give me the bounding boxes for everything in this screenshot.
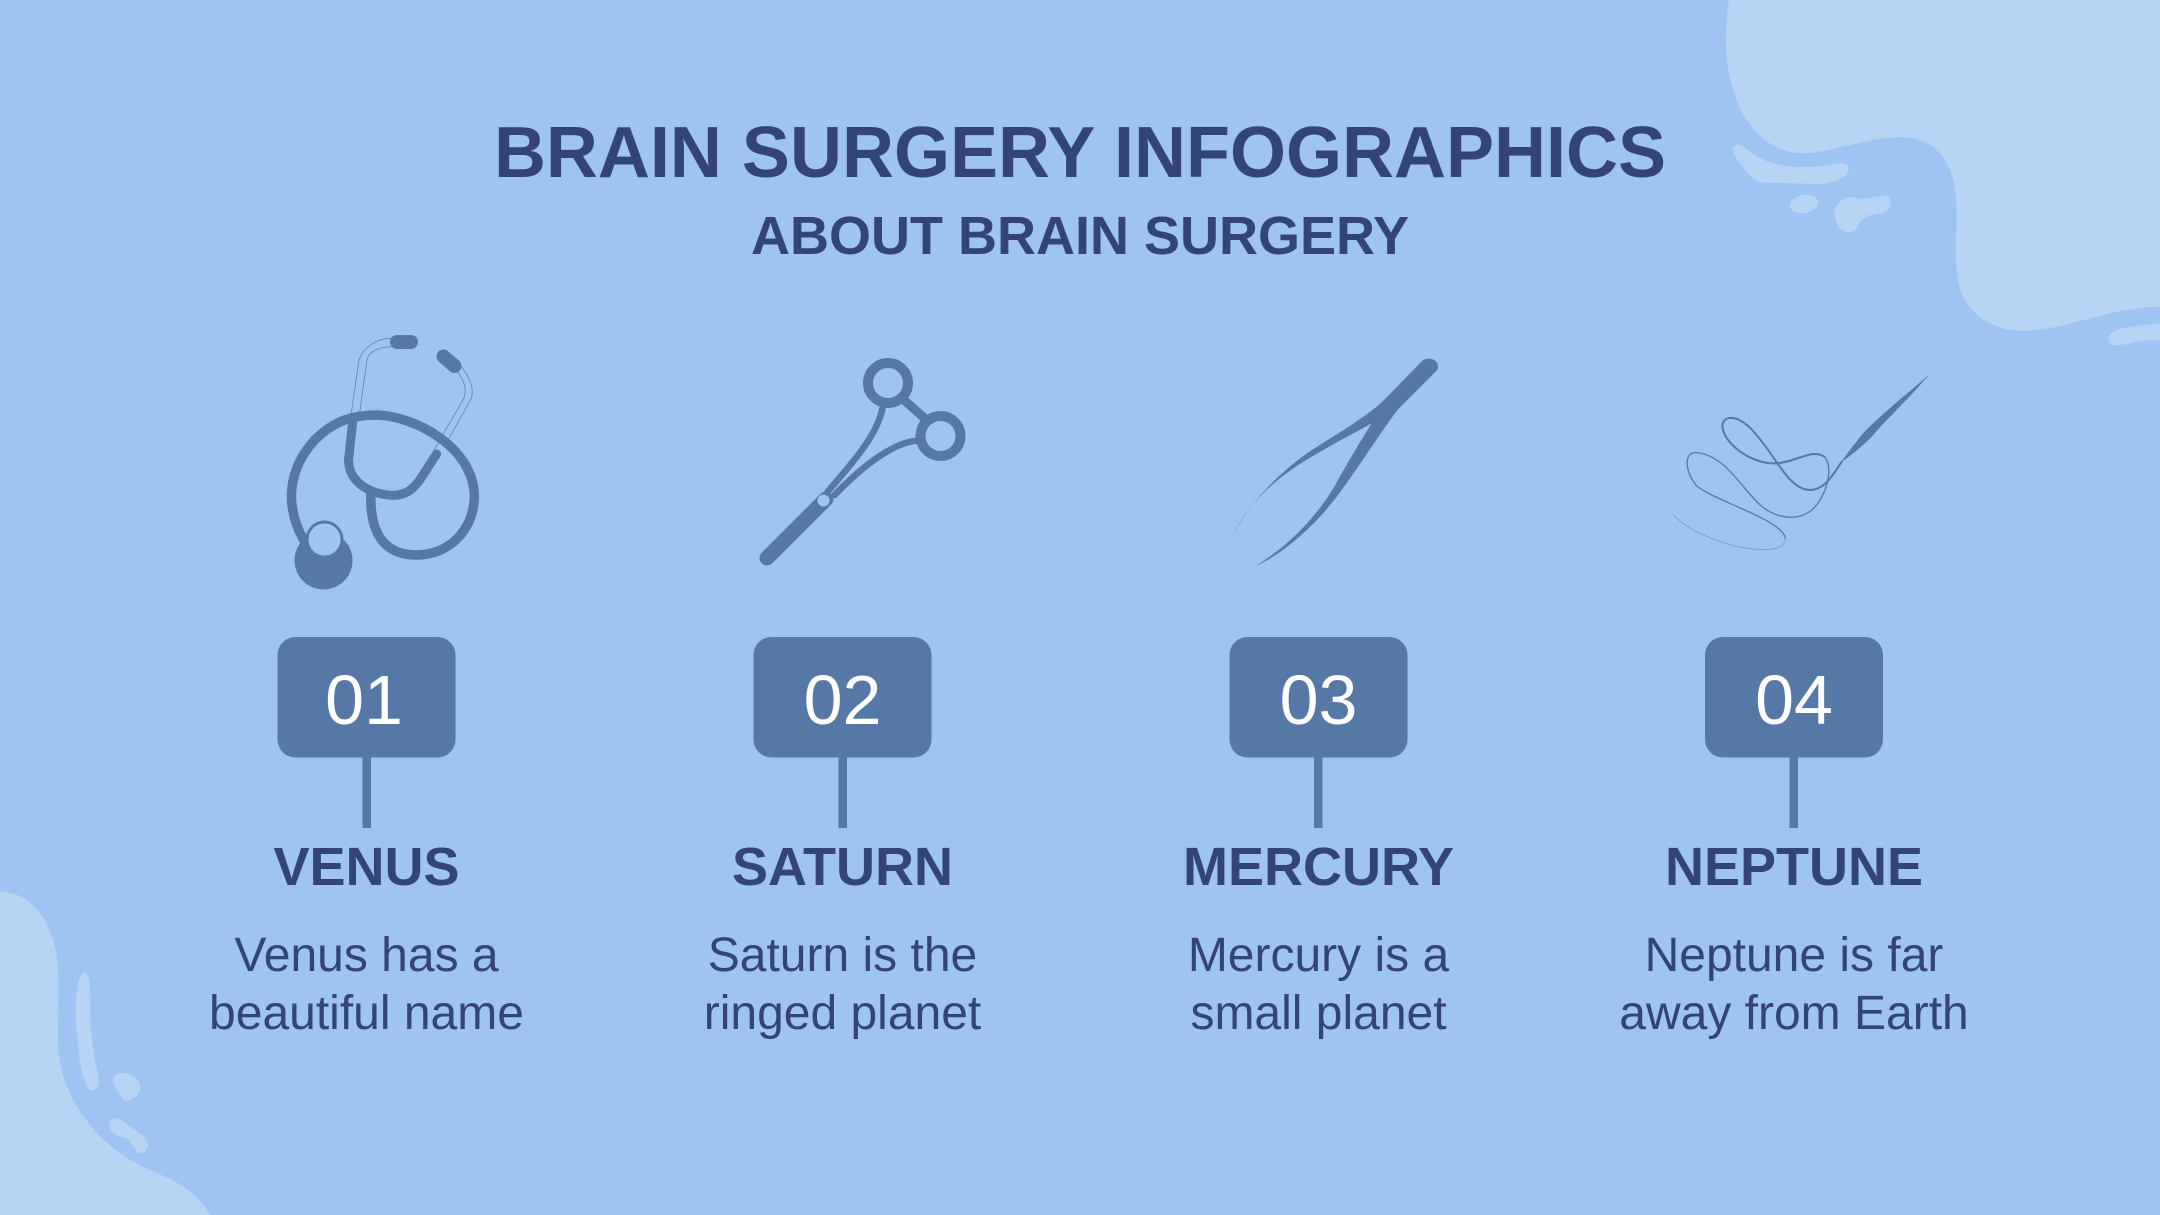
subtitle: ABOUT BRAIN SURGERY xyxy=(751,206,1409,266)
decorative blob: top right xyxy=(1726,0,2160,345)
panel: Neptune xyxy=(1619,374,1969,1040)
connector stem xyxy=(838,757,847,828)
heading: Venus: VENUS xyxy=(273,837,460,897)
text block: Mercury description: small planet xyxy=(1190,987,1447,1040)
number badge 03 xyxy=(1230,637,1408,758)
heading: Neptune: NEPTUNE xyxy=(1665,837,1923,897)
text block: Mercury description: Mercury is a xyxy=(1188,929,1449,982)
text block: Neptune description: away from Earth xyxy=(1619,987,1969,1040)
title: BRAIN SURGERY INFOGRAPHICS xyxy=(494,113,1666,193)
panel: Saturn xyxy=(704,363,981,1040)
number badge 01: 01 xyxy=(325,661,403,739)
text block: Venus description: beautiful name xyxy=(209,987,524,1040)
icon: suture needle and thread xyxy=(1674,374,1929,550)
number badge 02: 02 xyxy=(804,661,881,739)
heading: Saturn: SATURN xyxy=(732,837,953,897)
icon: surgical clamp xyxy=(767,363,960,558)
connector stem xyxy=(362,757,371,828)
text block: Saturn description: ringed planet xyxy=(704,987,981,1040)
text block: Neptune description: Neptune is far xyxy=(1645,929,1943,982)
number badge 03: 03 xyxy=(1280,661,1357,739)
icon: stethoscope xyxy=(291,335,474,590)
text block: Saturn description: Saturn is the xyxy=(708,929,977,982)
icon: tweezers xyxy=(1230,359,1438,567)
number badge 04: 04 xyxy=(1755,661,1833,739)
panel: Venus xyxy=(209,335,524,1040)
connector stem xyxy=(1314,757,1322,828)
decorative blob: bottom left xyxy=(0,892,210,1215)
number badge 04 xyxy=(1705,637,1883,758)
panel: Mercury xyxy=(1183,359,1454,1040)
heading: Mercury: MERCURY xyxy=(1183,837,1454,897)
number badge 02 xyxy=(754,637,932,758)
number badge 01 xyxy=(278,637,456,758)
connector stem xyxy=(1790,757,1798,828)
text block: Venus description: Venus has a xyxy=(234,929,499,982)
